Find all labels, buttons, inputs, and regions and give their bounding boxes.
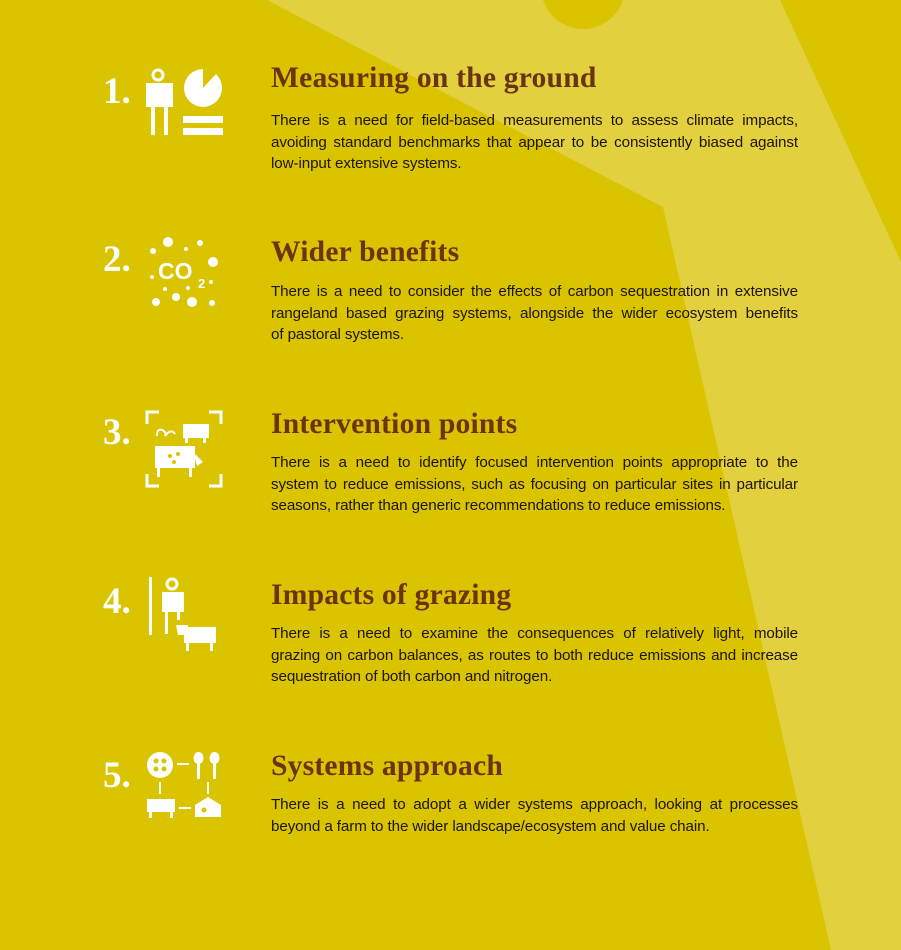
heading 4: Impacts of grazing [271, 579, 511, 611]
text 2: of pastoral systems. [271, 326, 404, 343]
heading 5: Systems approach [271, 750, 503, 782]
text 5: beyond a farm to the wider landscape/ecosystem and value chain. [271, 818, 710, 834]
text 2 [271, 283, 798, 343]
text 2: There is a need to consider the effects of carbon sequestration in extensive [271, 283, 798, 300]
icon: systems diagram [147, 752, 221, 818]
text 3: There is a need to identify focused intervention points appropriate to the [271, 454, 798, 471]
text 1: There is a need for field-based measurements to assess climate impacts, [271, 112, 798, 129]
text 2: rangeland based grazing systems, alongside the wider ecosystem benefits [271, 304, 798, 322]
text 3 [271, 454, 798, 514]
icon: CO2: 2 [198, 276, 205, 291]
number 1: 1. [103, 71, 131, 112]
number 3: 3. [103, 412, 131, 453]
text 1: avoiding standard benchmarks that appear to be consistently biased against [271, 134, 798, 150]
heading 2: Wider benefits [271, 236, 459, 268]
text 4: grazing on carbon balances, as routes to both reduce emissions and increase [271, 646, 798, 664]
text 4 [271, 625, 798, 685]
text 3: system to reduce emissions, such as focusing on particular sites in particular [271, 476, 798, 492]
text 4: There is a need to examine the consequences of relatively light, mobile [271, 625, 798, 642]
icon: CO2 [150, 237, 218, 307]
text 4: sequestration of both carbon and nitrogen. [271, 668, 552, 685]
icon: herder and cow [149, 577, 216, 651]
text 5 [271, 796, 798, 834]
text 5: There is a need to adopt a wider systems approach, looking at processes [271, 796, 798, 813]
number 5: 5. [103, 755, 131, 796]
text 1 [271, 112, 798, 172]
icon: person and pie [146, 68, 223, 135]
text 3: seasons, rather than generic recommendations to reduce emissions. [271, 497, 725, 514]
number 2: 2. [103, 239, 131, 280]
number 4: 4. [103, 581, 131, 622]
heading 3: Intervention points [271, 408, 517, 440]
icon: framed cattle [146, 410, 222, 488]
icon: CO2: CO [158, 258, 192, 284]
heading 1: Measuring on the ground [271, 62, 597, 94]
text 1: low-input extensive systems. [271, 155, 462, 172]
